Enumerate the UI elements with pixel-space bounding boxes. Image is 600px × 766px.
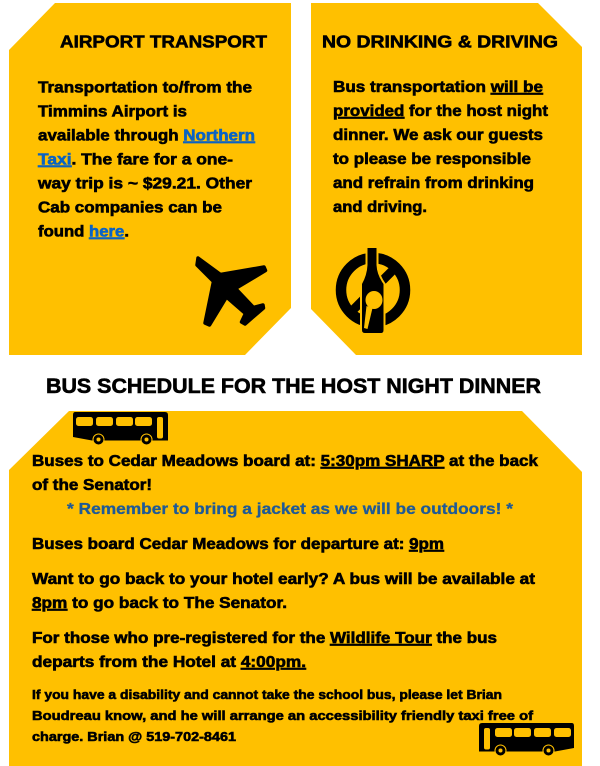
heading: airport transport: AIRPORT TRANSPORT: [60, 32, 267, 52]
text block: drinking details: Bus transportation will be: [333, 79, 543, 96]
panel: airport transport: [9, 3, 291, 355]
text block: airport details: Taxi. The fare for a one-: [38, 152, 233, 168]
text block: drinking details: to please be responsible: [333, 151, 531, 168]
text: boarding time: of the Senator!: [32, 477, 152, 494]
text: early bus: [32, 571, 535, 612]
text block: airport details: Cab companies can be: [38, 200, 222, 216]
text: accessibility note: Boudreau know, and he will arrange an accessibility friendly taxi free of: [32, 708, 534, 723]
text: accessibility note: [32, 687, 534, 744]
text: wildlife tour: departs from the Hotel at 4:00pm.: [32, 654, 306, 671]
text block: airport details: found here.: [38, 224, 129, 240]
text block: airport details: Transportation to/from the: [38, 80, 252, 96]
text block: drinking details: and refrain from drinking: [333, 175, 534, 192]
text block: drinking details: [333, 79, 548, 216]
text: departure time: Buses board Cedar Meadows for departure at: 9pm: [32, 536, 444, 553]
text block: drinking details: dinner. We ask our guests: [333, 127, 543, 144]
text block: airport details: available through Northern: [38, 128, 255, 144]
icon: bus top: [73, 412, 168, 445]
heading: no drinking and driving: NO DRINKING & DRIVING: [322, 32, 558, 52]
text: early bus: 8pm to go back to The Senator.: [32, 595, 287, 612]
text block: airport details: way trip is ~ $29.21. Other: [37, 176, 252, 192]
panel: bus schedule: [9, 411, 582, 766]
icon: bus bottom: [479, 723, 574, 756]
panel: no drinking and driving: [311, 3, 582, 355]
icon: no drinking bottle and key: [341, 248, 405, 333]
text: wildlife tour: For those who pre-registered for the Wildlife Tour the bus: [32, 630, 497, 647]
text: wildlife tour: [32, 630, 497, 671]
text: boarding time: [32, 453, 538, 494]
text: accessibility note: If you have a disability and cannot take the school bus, please let Brian: [32, 687, 502, 702]
text: early bus: Want to go back to your hotel early? A bus will be available at: [32, 571, 535, 588]
text block: airport details: [37, 80, 255, 240]
text block: drinking details: provided for the host night: [333, 103, 548, 120]
icon: airplane: [197, 258, 266, 325]
title: bus schedule: BUS SCHEDULE FOR THE HOST NIGHT DINNER: [46, 375, 541, 398]
text block: airport details: Timmins Airport is: [38, 104, 187, 120]
text: boarding time: Buses to Cedar Meadows board at: 5:30pm SHARP at the back: [32, 453, 538, 470]
text block: drinking details: and driving.: [333, 199, 427, 216]
text: jacket reminder: * Remember to bring a jacket as we will be outdoors! *: [67, 501, 514, 518]
text: accessibility note: charge. Brian @ 519-702-8461: [32, 729, 237, 744]
